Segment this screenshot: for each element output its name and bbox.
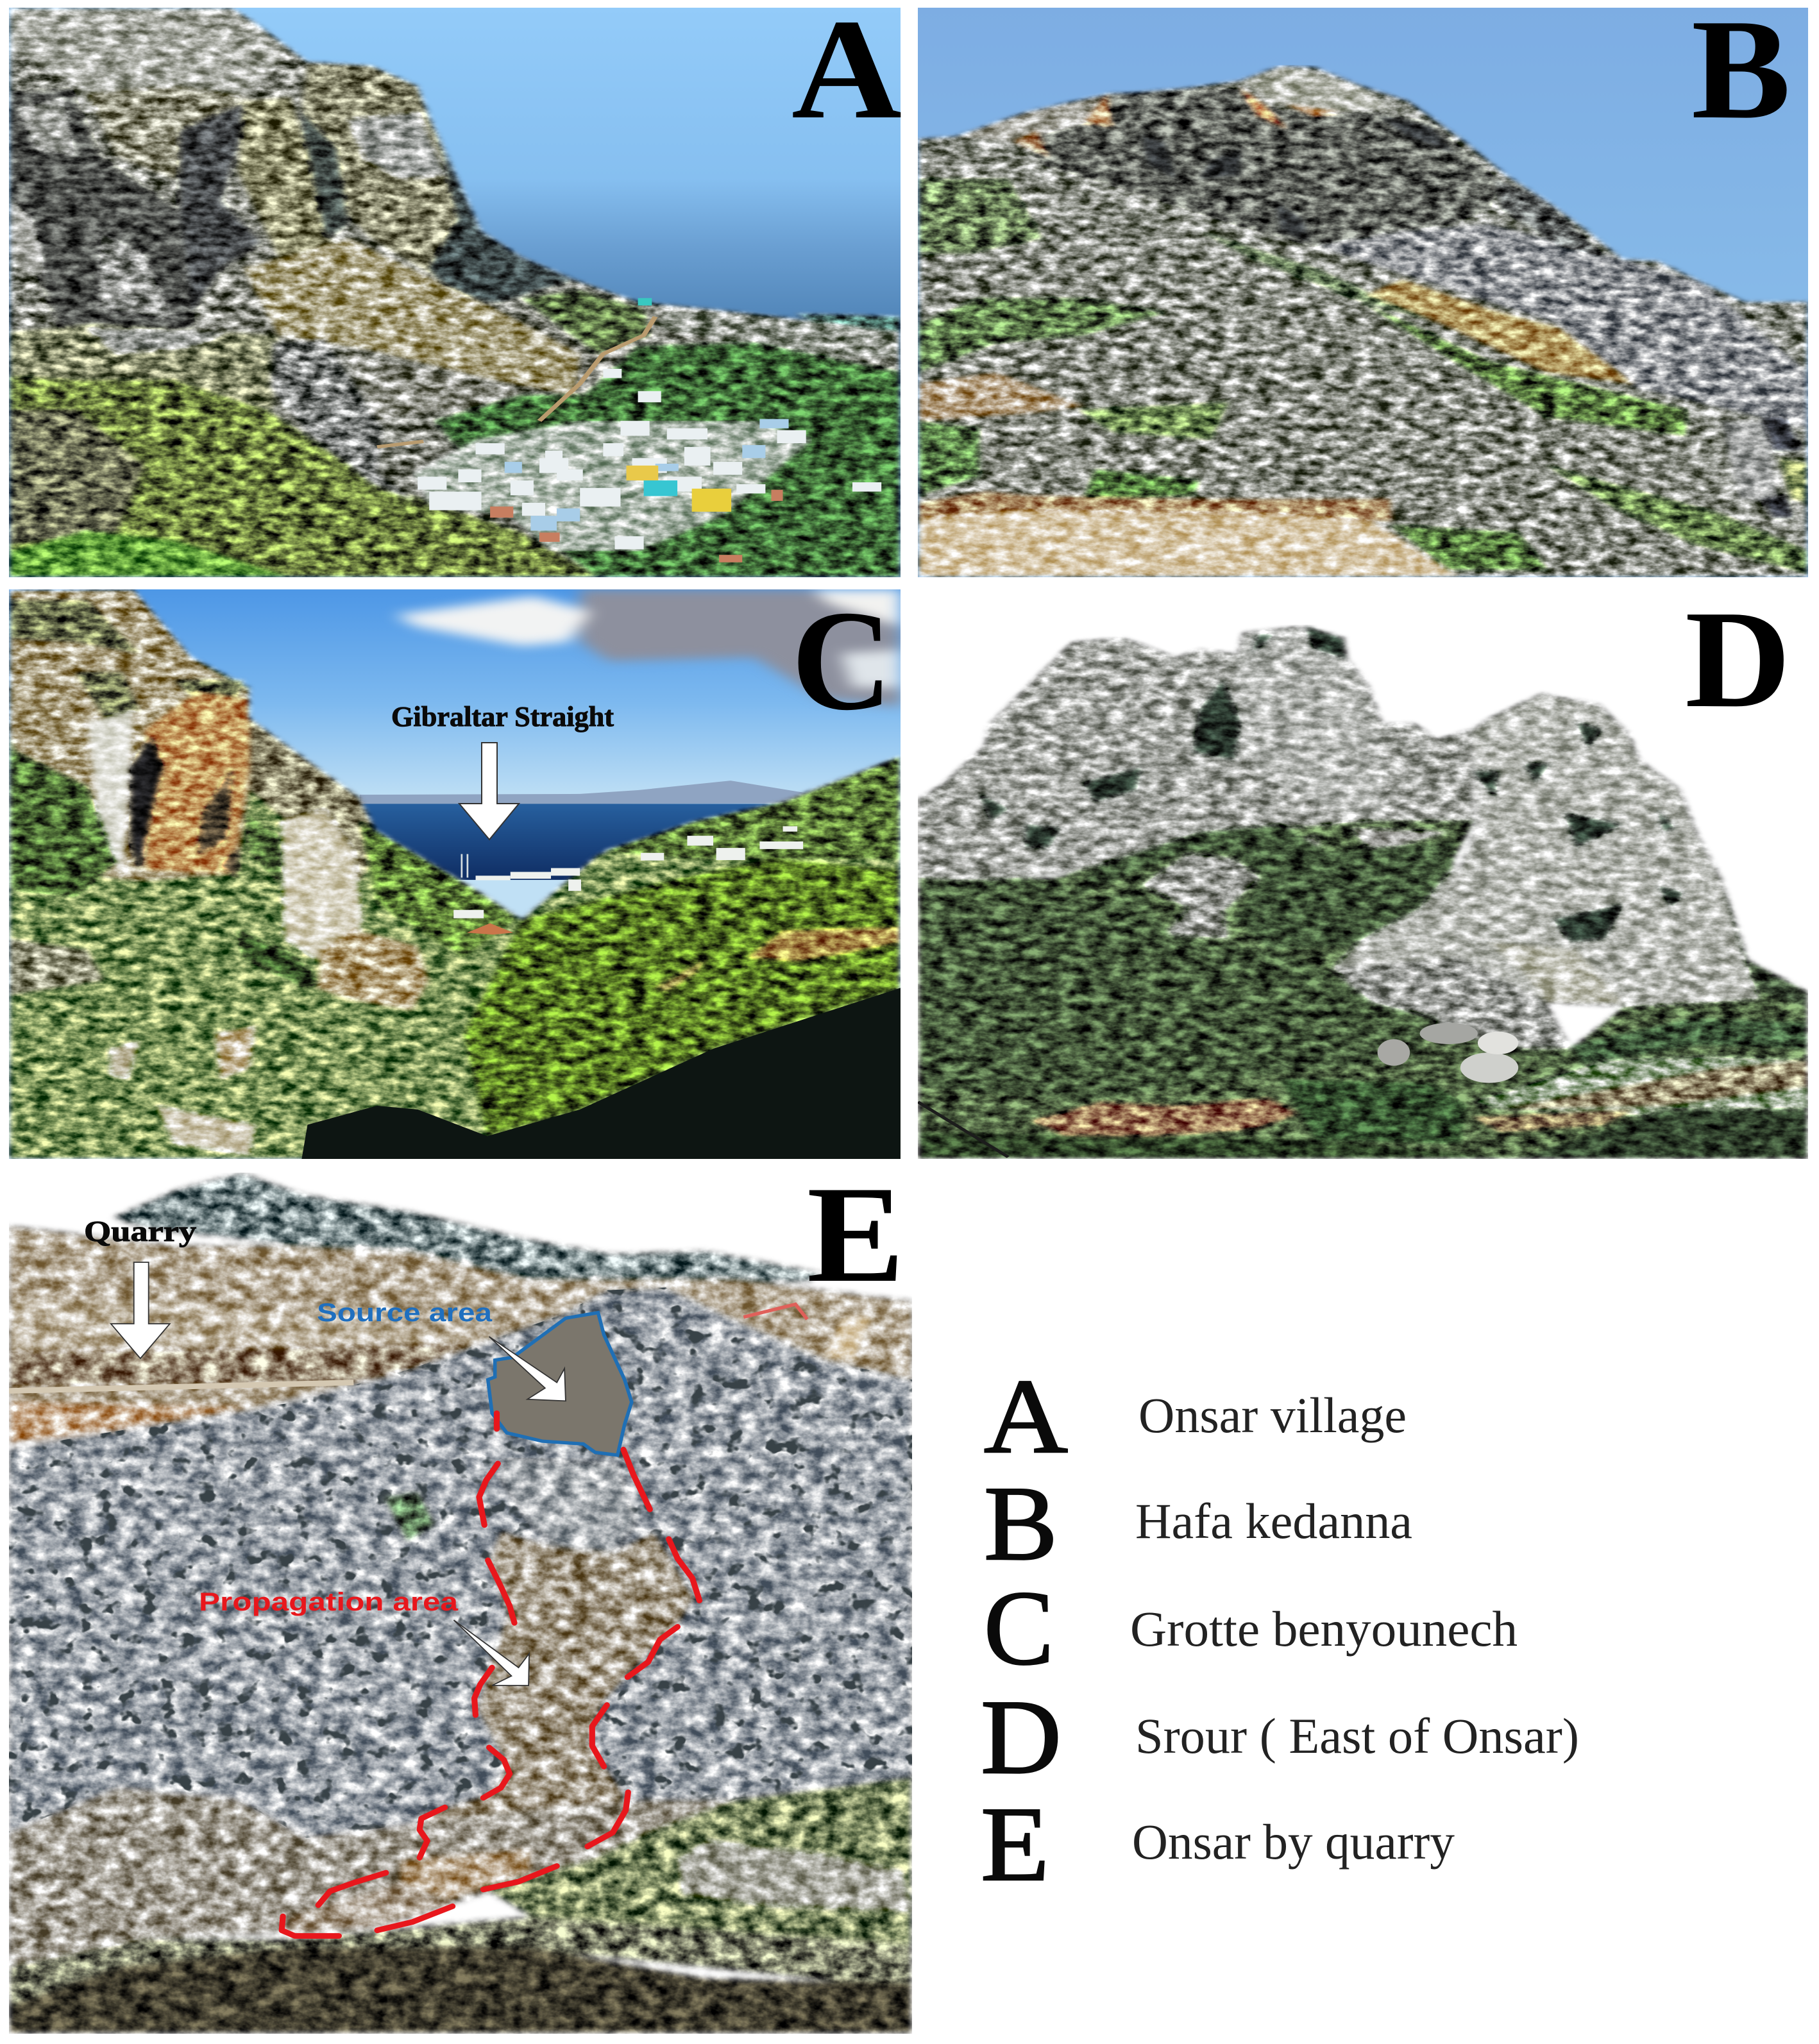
photo: Hafa kedanna limestone peak bbox=[918, 8, 1808, 577]
label: Gibraltar Straight: Gibraltar Straight bbox=[391, 701, 614, 732]
legend entry A bbox=[984, 1357, 1407, 1475]
legend entry D: D bbox=[981, 1678, 1062, 1796]
propagation area dashed outline bbox=[282, 1414, 699, 1936]
source area outline bbox=[488, 1313, 632, 1455]
legend entry D: Srour ( East of Onsar) bbox=[1135, 1708, 1579, 1764]
legend entry E: Onsar by quarry bbox=[1132, 1814, 1455, 1870]
legend entry C bbox=[984, 1569, 1518, 1687]
photo: Onsar village below cliffs bbox=[9, 8, 901, 577]
photo: rockfall slope beside quarry bbox=[9, 1172, 912, 2034]
panel C: Grotte benyounech bbox=[9, 581, 901, 1159]
photo: Grotte benyounech valley and strait bbox=[9, 589, 901, 1159]
excavator bbox=[743, 1305, 808, 1319]
photo: Srour limestone crags bbox=[918, 625, 1808, 1159]
legend entry C: C bbox=[984, 1569, 1054, 1687]
panel letter E: E bbox=[807, 1158, 904, 1311]
panel B: Hafa kedanna bbox=[918, 0, 1808, 577]
legend bbox=[981, 1357, 1579, 1903]
label: Propagation area: Propagation area bbox=[199, 1588, 459, 1616]
arrow: propagation area bbox=[453, 1620, 529, 1685]
legend entry A: Onsar village bbox=[1138, 1387, 1407, 1443]
label: Quarry: Quarry bbox=[84, 1215, 196, 1247]
panel E: Onsar by quarry bbox=[9, 1158, 912, 2034]
legend entry E bbox=[981, 1785, 1455, 1903]
legend entry B bbox=[984, 1464, 1412, 1582]
legend entry D bbox=[981, 1678, 1579, 1796]
panel letter D: D bbox=[1685, 582, 1791, 737]
legend entry B: Hafa kedanna bbox=[1135, 1493, 1412, 1549]
legend entry C: Grotte benyounech bbox=[1130, 1601, 1518, 1657]
legend entry E: E bbox=[981, 1785, 1049, 1903]
arrow: source area bbox=[489, 1337, 566, 1401]
panel A: Onsar village bbox=[9, 0, 902, 577]
label: Source area: Source area bbox=[317, 1299, 493, 1327]
legend entry B: B bbox=[984, 1464, 1058, 1582]
arrow: to the strait bbox=[459, 743, 519, 840]
panel letter C: C bbox=[791, 581, 892, 740]
panel D: Srour bbox=[918, 582, 1808, 1159]
legend entry A: A bbox=[984, 1357, 1068, 1475]
arrow: quarry bbox=[111, 1262, 170, 1358]
